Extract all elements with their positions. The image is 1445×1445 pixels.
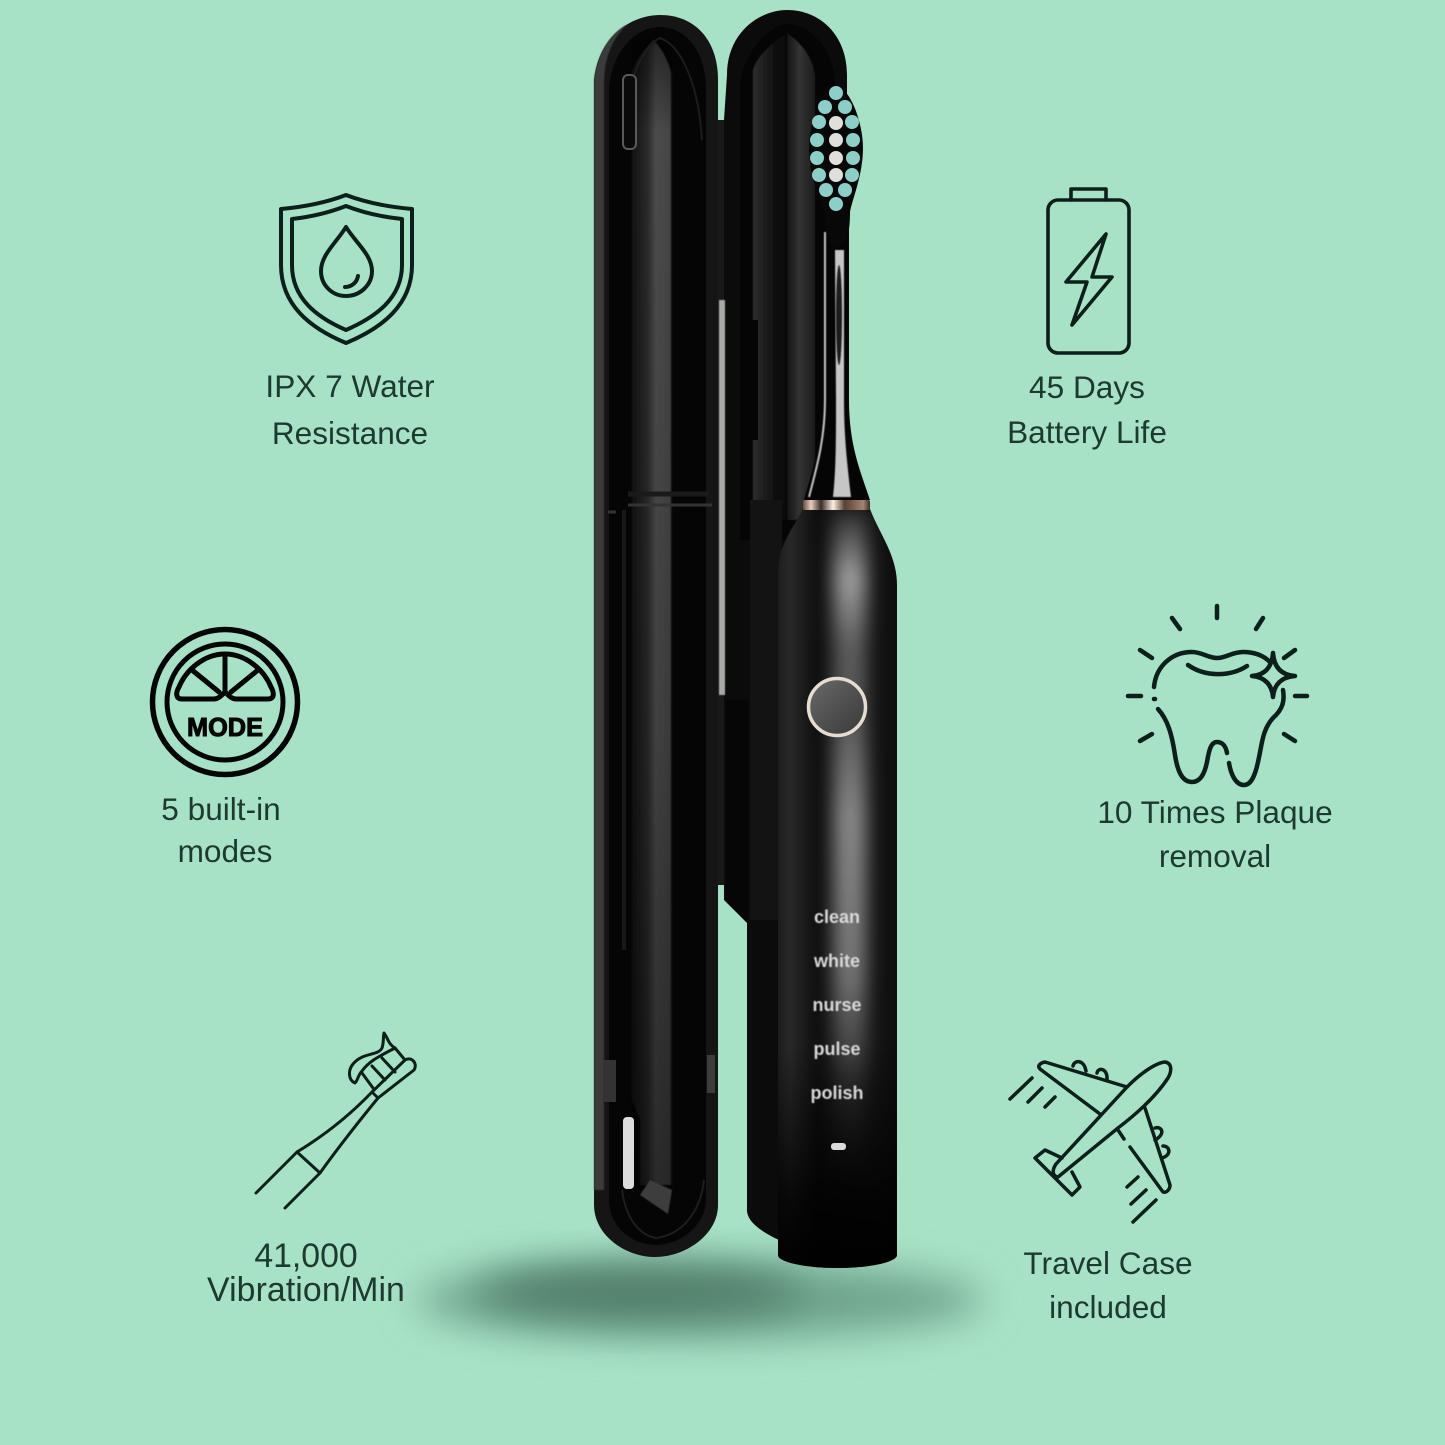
case right shell [724,10,847,1240]
mode labels: pulse [813,1039,861,1059]
inner light band [632,40,672,1185]
label: modes [178,833,272,869]
brush neck [804,205,870,500]
feature: built-in modes [152,630,298,869]
feature: water resistance [265,195,435,451]
case clip [623,1117,634,1189]
case seam [608,505,712,512]
charge indicator [831,1143,846,1150]
product: electric toothbrush [778,86,897,1268]
feature: vibration [207,1033,415,1309]
rose gold collar [803,500,870,510]
label: removal [1159,838,1271,874]
icon: mode dial: MODE [187,712,263,742]
floor shadow [415,1262,985,1338]
handle body [778,509,897,1268]
label: Vibration/Min [207,1271,405,1309]
label: Resistance [272,415,428,451]
feature: travel case [1010,1062,1193,1325]
label: 10 Times Plaque [1097,794,1333,830]
mode labels: nurse [812,995,862,1015]
case hinge highlight [719,300,725,695]
icon: sparkling tooth [1128,606,1307,785]
icon: mode dial [152,630,298,774]
brush head [809,85,863,248]
label: 5 built-in [161,791,281,827]
product: open travel case [594,10,847,1257]
label: Battery Life [1007,414,1167,450]
mode labels: clean [814,907,860,927]
label: included [1049,1289,1167,1325]
case lower curve [622,1180,704,1238]
icon: toothbrush with paste [256,1033,415,1208]
mode labels: white [813,951,860,971]
mode labels: polish [810,1083,864,1103]
icon: shield with water drop [281,195,412,343]
label: 41,000 [254,1237,358,1275]
case left shell [594,15,718,1257]
label: Travel Case [1023,1245,1193,1281]
label: IPX 7 Water [265,368,435,404]
power button [808,678,866,736]
bristles [810,86,860,211]
case slot [623,75,636,149]
case tabs [603,1060,616,1102]
icon: battery with lightning bolt [1048,189,1129,353]
case hinge [716,120,730,885]
feature: battery life [1007,189,1167,450]
feature: plaque removal [1097,606,1333,874]
mode labels [810,907,864,1103]
label: 45 Days [1029,369,1145,405]
icon: airplane [1010,1062,1171,1222]
